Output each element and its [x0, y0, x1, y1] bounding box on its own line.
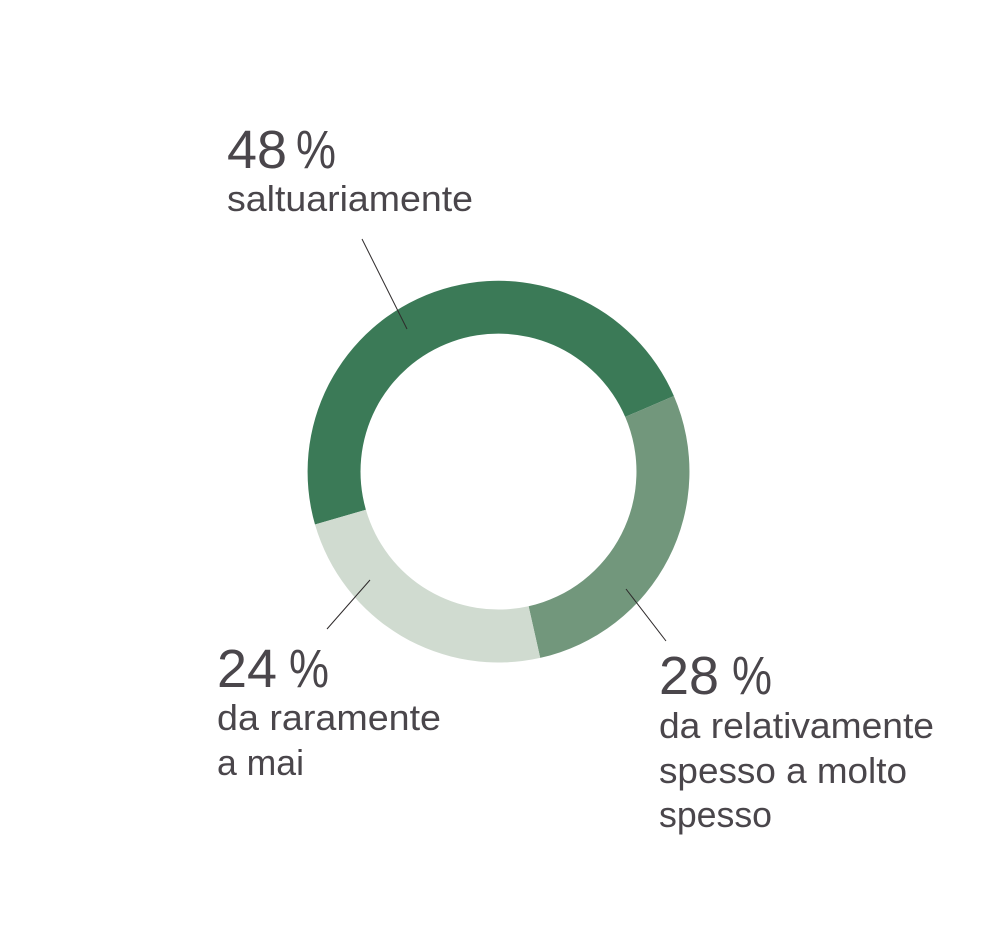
leader line: 48%: [362, 239, 407, 329]
label: 24% da raramente a mai: %: [289, 639, 329, 699]
label: 24% da raramente a mai: da raramente: [217, 697, 441, 738]
label: 48% saltuariamente: %: [296, 120, 336, 180]
label: 24% da raramente a mai: [217, 639, 441, 783]
label: 28% da relativamente spesso a molto spesso: spesso: [659, 794, 772, 835]
label: 28% da relativamente spesso a molto spesso: spesso a molto: [659, 750, 907, 791]
label: 28% da relativamente spesso a molto spesso: [659, 646, 934, 835]
leader line: 28%: [626, 589, 666, 641]
segment: 24% da raramente a mai: [315, 510, 540, 663]
label: 48% saltuariamente: 48: [227, 120, 287, 180]
label: 28% da relativamente spesso a molto spesso: %: [732, 646, 772, 706]
segment: 48% saltuariamente: [308, 281, 674, 524]
segment: 28% da relativamente spesso a molto spesso: [529, 396, 689, 658]
leader line: 24%: [327, 580, 370, 629]
label: 28% da relativamente spesso a molto spesso: da relativamente: [659, 705, 934, 746]
label: 28% da relativamente spesso a molto spesso: 28: [659, 646, 719, 706]
label: 48% saltuariamente: saltuariamente: [227, 178, 473, 219]
label: 24% da raramente a mai: 24: [217, 639, 277, 699]
donut chart: [308, 281, 689, 663]
label: 48% saltuariamente: [227, 120, 473, 219]
label: 24% da raramente a mai: a mai: [217, 742, 304, 783]
